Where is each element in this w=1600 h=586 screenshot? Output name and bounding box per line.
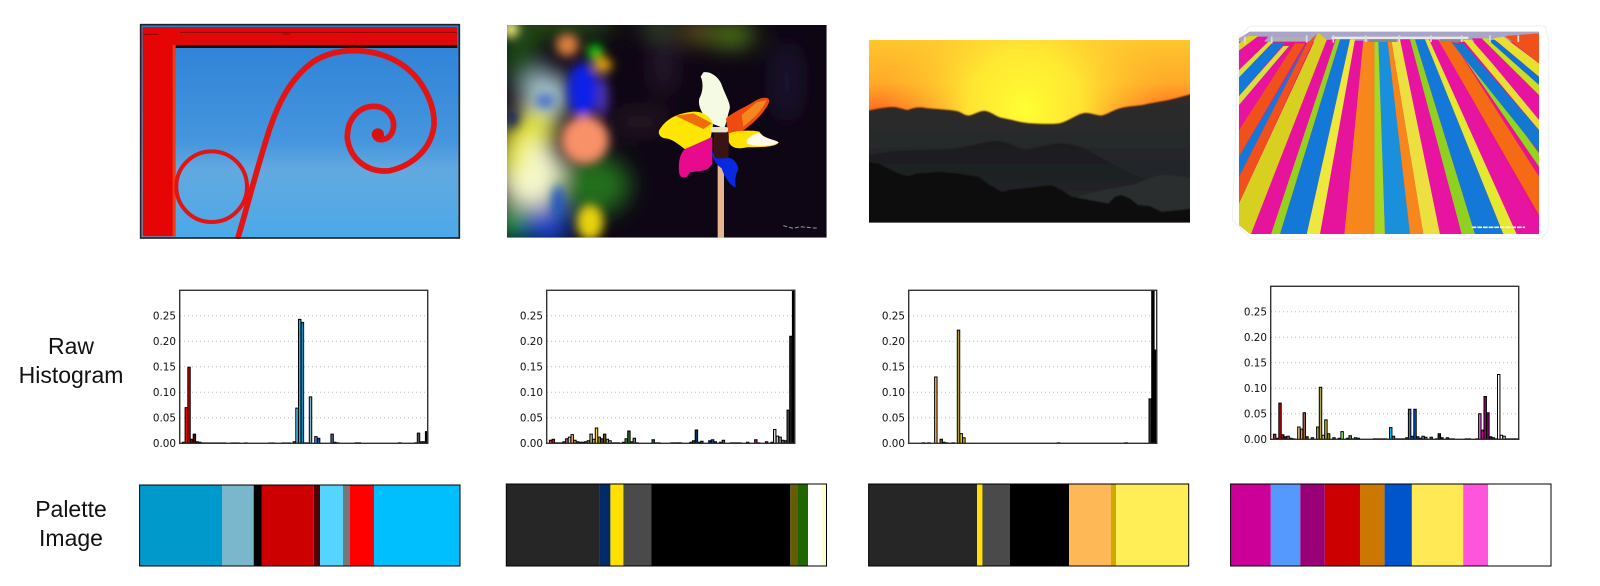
photo: striped curtain <box>1232 26 1548 239</box>
tick labels 1: 0.15 <box>153 361 176 373</box>
tick labels 4 <box>1244 306 1267 446</box>
photo: pinwheel <box>507 25 827 238</box>
tick labels 1: 0.25 <box>153 310 176 322</box>
histogram 1 <box>153 290 428 450</box>
tick labels 1 <box>153 310 176 450</box>
tick labels 1: 0.00 <box>153 438 176 450</box>
palette strip 4 <box>1231 484 1551 566</box>
tick labels 3 <box>882 310 905 450</box>
tick labels 4: 0.00 <box>1244 434 1267 446</box>
tick labels 1: 0.05 <box>153 412 176 424</box>
tick labels 3: 0.10 <box>882 387 905 399</box>
tick labels 2: 0.25 <box>520 310 543 322</box>
tick labels 4: 0.10 <box>1244 383 1267 395</box>
palette strip 3 <box>869 484 1189 566</box>
label: palette image: Palette <box>35 496 107 522</box>
tick labels 3: 0.20 <box>882 336 905 348</box>
palette strip 2 <box>506 484 826 566</box>
label: raw histogram: Histogram <box>19 362 123 388</box>
bars 4 <box>1273 375 1519 439</box>
tick labels 2: 0.15 <box>520 361 543 373</box>
histogram 2 <box>520 290 795 450</box>
tick labels 2: 0.10 <box>520 387 543 399</box>
tick labels 2: 0.00 <box>520 438 543 450</box>
tick labels 3: 0.00 <box>882 438 905 450</box>
photo: red ironwork on blue sky <box>141 25 459 238</box>
tick labels 4: 0.15 <box>1244 357 1267 369</box>
tick labels 4: 0.05 <box>1244 408 1267 420</box>
tick labels 1: 0.10 <box>153 387 176 399</box>
tick labels 3: 0.25 <box>882 310 905 322</box>
histogram 4 <box>1244 286 1519 446</box>
bars 2 <box>549 290 795 443</box>
palette strip 1 <box>140 485 460 566</box>
tick labels 3: 0.15 <box>882 361 905 373</box>
tick labels 3: 0.05 <box>882 412 905 424</box>
tick labels 1: 0.20 <box>153 336 176 348</box>
histogram 3 <box>882 290 1157 450</box>
bars 3 <box>922 290 1157 443</box>
bars 1 <box>182 319 428 443</box>
tick labels 2: 0.05 <box>520 412 543 424</box>
photo: mountain sunset <box>865 40 1193 227</box>
tick labels 2 <box>520 310 543 450</box>
tick labels 2: 0.20 <box>520 336 543 348</box>
label: raw histogram: Raw <box>48 333 94 359</box>
label: palette image: Image <box>39 525 103 551</box>
tick labels 4: 0.25 <box>1244 306 1267 318</box>
tick labels 4: 0.20 <box>1244 332 1267 344</box>
